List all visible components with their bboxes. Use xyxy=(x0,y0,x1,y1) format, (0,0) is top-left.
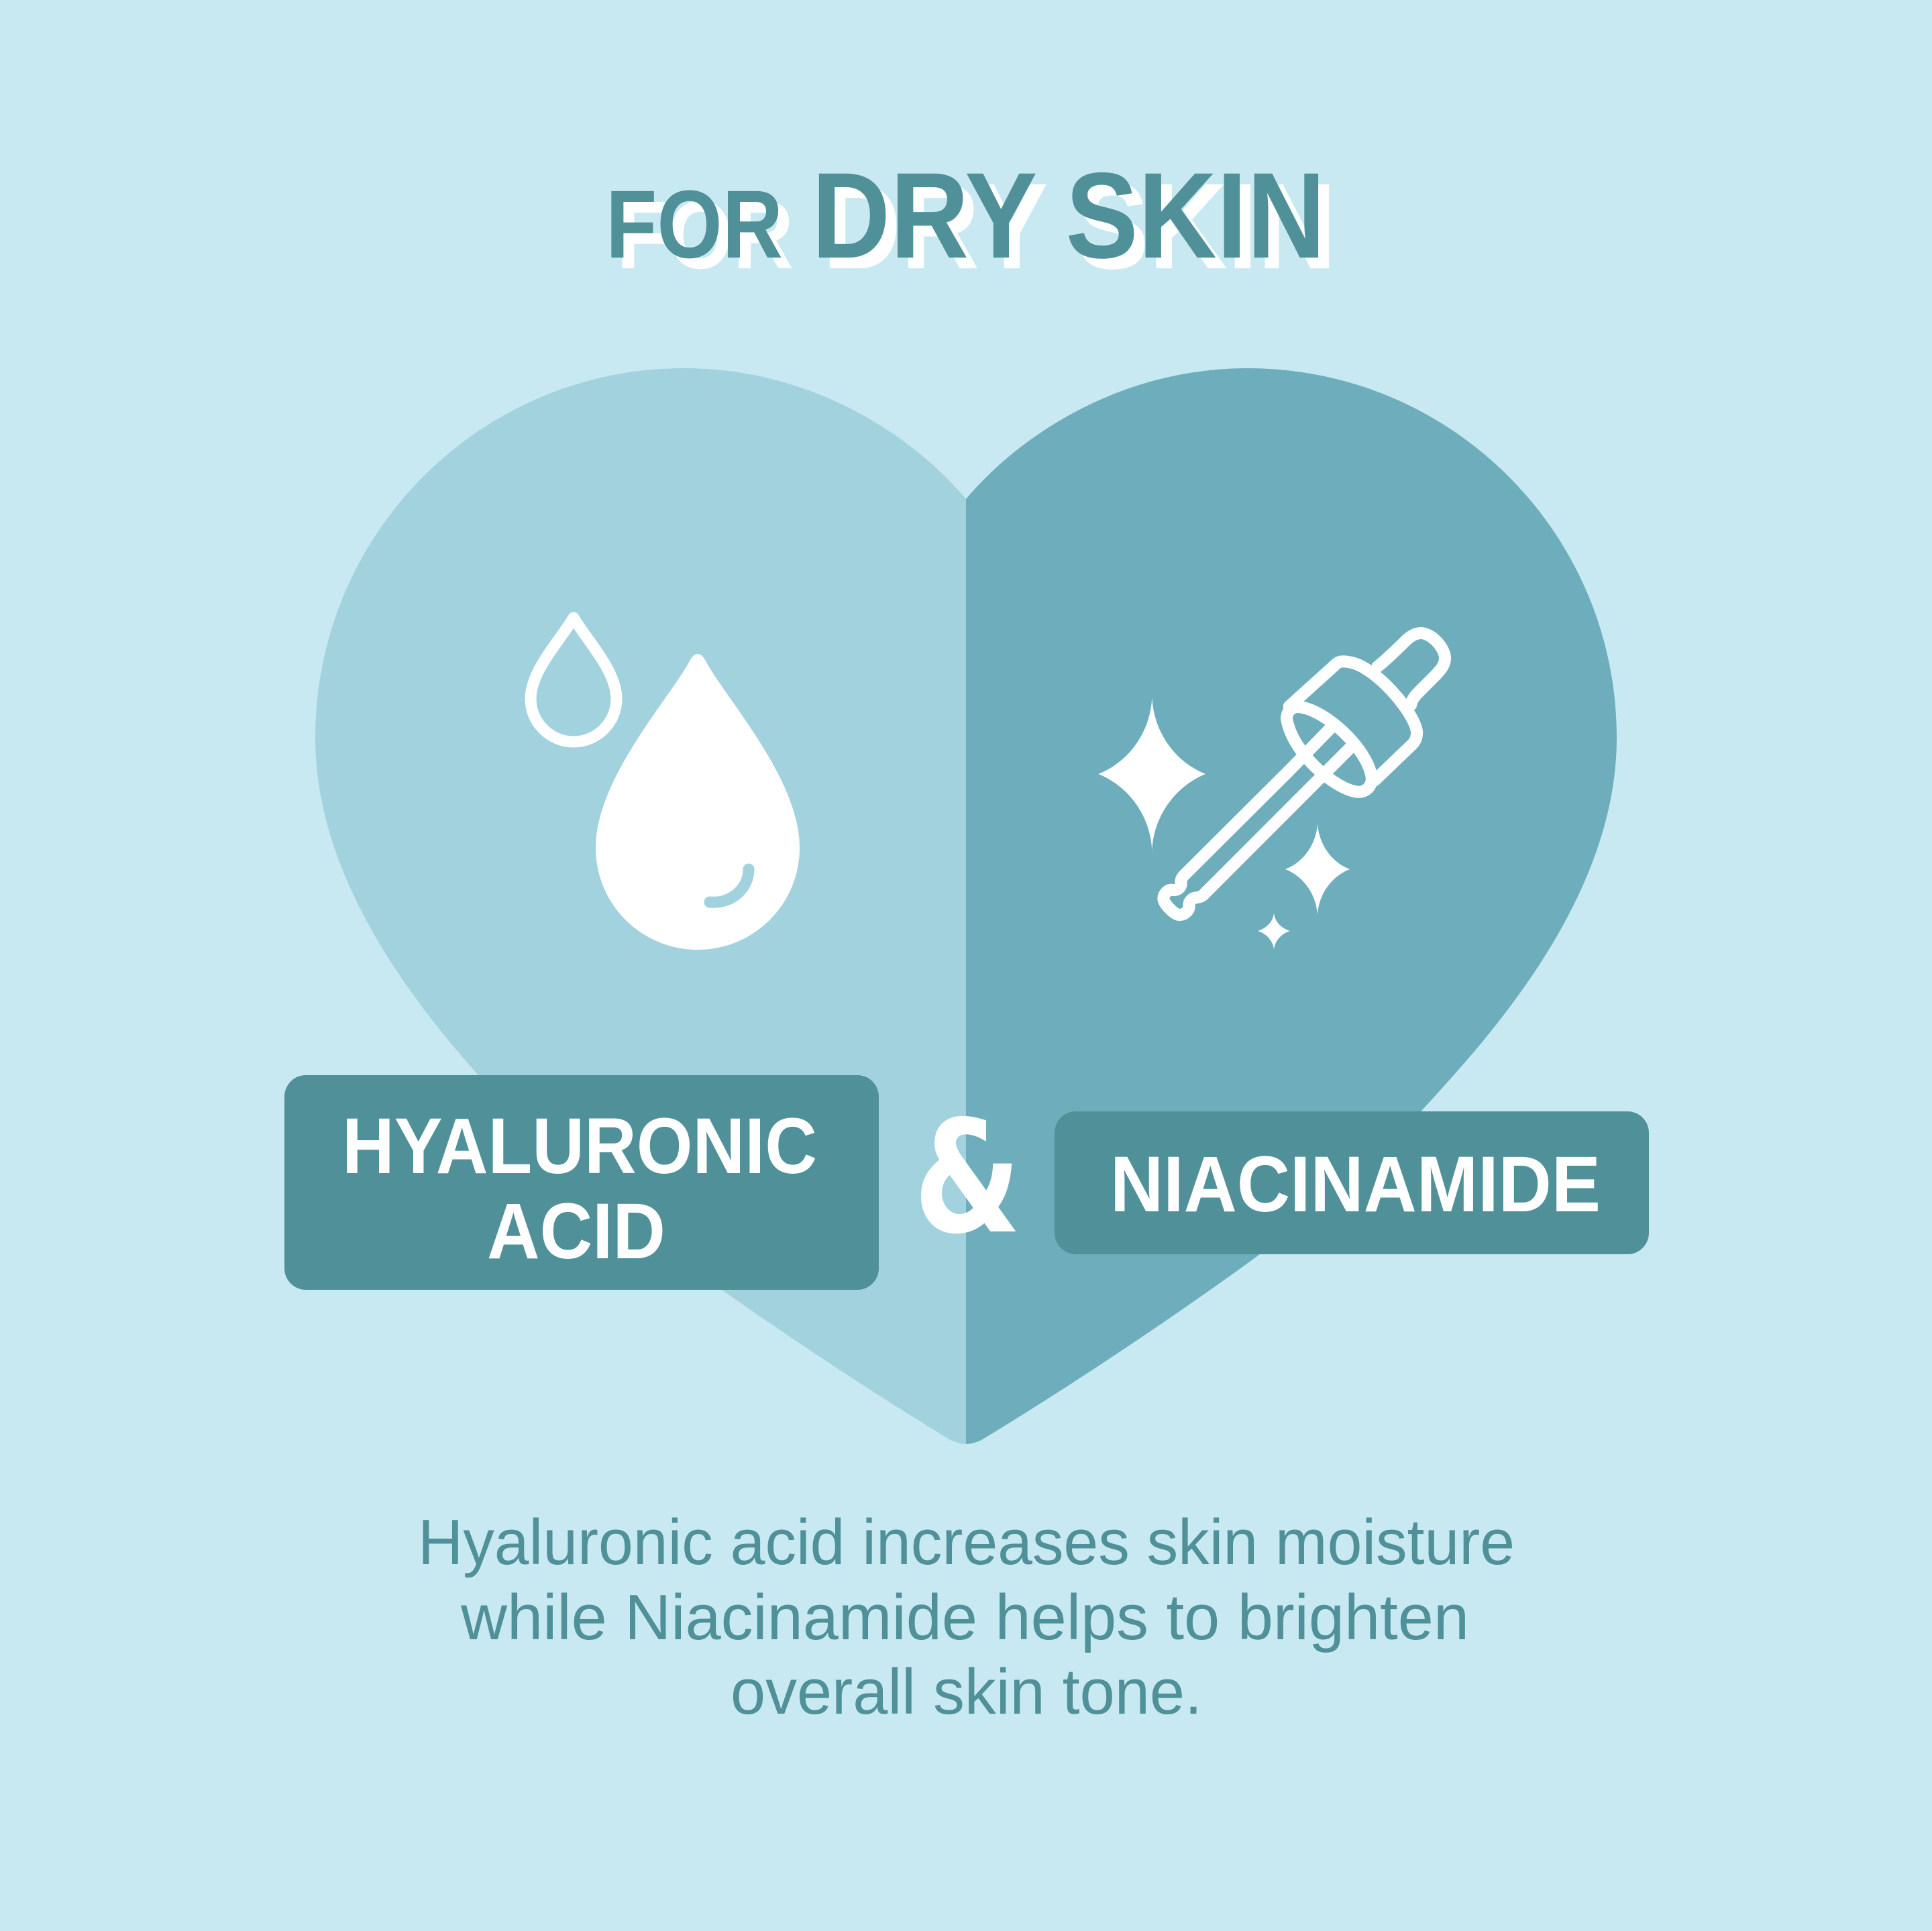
large solid drop xyxy=(596,654,800,950)
title: for dry skin xyxy=(606,147,1336,294)
small outlined drop xyxy=(531,618,616,742)
title shadow: DRY SKIN xyxy=(822,158,1336,294)
heart right half xyxy=(966,368,1617,1444)
label: hyaluronic acid xyxy=(284,1075,879,1290)
description text xyxy=(418,1506,1515,1728)
title shadow xyxy=(616,158,1336,294)
label: niacinamide xyxy=(1055,1111,1649,1254)
description text: Hyaluronic acid increases skin moisture xyxy=(418,1506,1515,1578)
title foreground: FOR xyxy=(606,170,783,278)
title foreground: DRY SKIN xyxy=(812,147,1326,284)
title foreground xyxy=(606,147,1326,284)
label: niacinamide: NIACINAMIDE xyxy=(1110,1140,1601,1229)
dropper xyxy=(1163,633,1445,915)
small sparkle xyxy=(1258,913,1290,950)
label: hyaluronic acid: ACID xyxy=(487,1187,665,1276)
large sparkle xyxy=(1098,698,1205,850)
icon: water drops xyxy=(531,618,800,950)
title shadow: FOR xyxy=(616,181,794,289)
description text: while Niacinamide helps to brighten xyxy=(460,1582,1469,1653)
heart left half xyxy=(315,368,966,1444)
ampersand: & xyxy=(914,1087,1021,1268)
icon: dropper and sparkles xyxy=(1098,633,1445,950)
drop highlight xyxy=(710,869,749,902)
heart xyxy=(315,368,1617,1444)
description text: overall skin tone. xyxy=(731,1656,1202,1728)
label: hyaluronic acid: HYALURONIC xyxy=(342,1102,817,1191)
medium sparkle xyxy=(1285,824,1350,915)
